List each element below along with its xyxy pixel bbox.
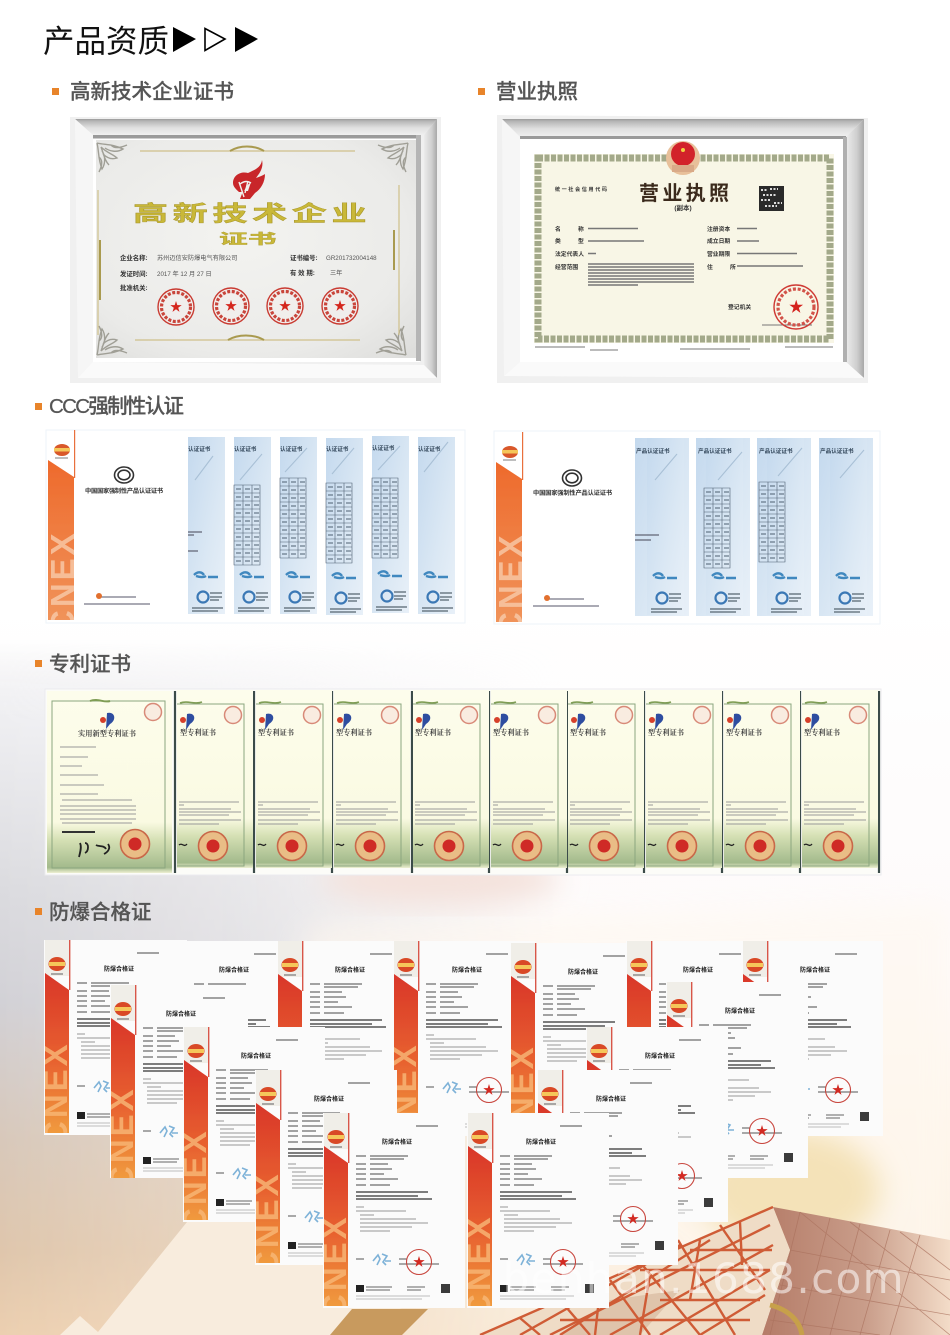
license details: 法定代表人 — [555, 250, 584, 258]
certificate 3 — [278, 941, 393, 1070]
separators — [175, 691, 879, 873]
blue panels: 产品认证证书 — [698, 447, 732, 455]
certificate 4 — [394, 941, 534, 1136]
certificate 14 — [316, 1113, 465, 1318]
license sheet — [534, 154, 834, 343]
panel: CCC certificate strip 1: 中国国家强制性产品认证证书 — [85, 487, 163, 495]
orange cover strip — [48, 430, 76, 620]
heading: CCC: CCC强制性认证 — [49, 395, 184, 418]
certificate 14: CNEX — [316, 1214, 353, 1318]
patent pages: 型专利证书 — [804, 728, 841, 737]
title: 产品资质 — [43, 23, 169, 59]
heading: patents: 专利证书 — [49, 653, 131, 676]
QR code — [759, 186, 784, 211]
certificate 5: 防爆合格证 — [568, 968, 598, 976]
panel: business license in frame: (副本) — [674, 203, 692, 212]
patent pages: 型专利证书 — [180, 728, 217, 737]
certificate 1: CNEX — [37, 1041, 74, 1145]
icon: triple arrows — [173, 27, 258, 52]
CCC logo — [114, 467, 134, 483]
certificate 11: CNEX — [579, 1128, 616, 1232]
patent pages — [177, 690, 878, 868]
back row — [37, 940, 883, 1148]
certificate 7: 防爆合格证 — [800, 966, 830, 974]
certificate 12: 防爆合格证 — [314, 1095, 344, 1103]
patent pages: 型专利证书 — [336, 728, 373, 737]
icon: red flame logo — [233, 160, 265, 199]
blue panels: 认证证书 — [188, 445, 211, 453]
certificate 11: 防爆合格证 — [645, 1052, 675, 1060]
orange cover strip: CNEX — [44, 530, 81, 634]
certificate details: 苏州迈信安防爆电气有限公司 — [157, 254, 237, 262]
certificate 1: 防爆合格证 — [104, 965, 134, 973]
panel: patent certificates strip — [45, 689, 881, 875]
license details: 成立日期 — [707, 237, 730, 245]
blue panels: 产品认证证书 — [636, 447, 670, 455]
certificate details: GR201732004148 — [326, 255, 377, 262]
certificate 3: 防爆合格证 — [335, 966, 365, 974]
watermark: benhan.1688.com — [503, 1254, 905, 1303]
certificate 1 — [37, 940, 187, 1145]
patent pages: 型专利证书 — [415, 728, 452, 737]
certificate 3: CNEX — [270, 1042, 307, 1146]
certificate 5 — [511, 943, 626, 1113]
certificate details — [120, 253, 377, 292]
certificate 9: CNEX — [659, 1083, 696, 1187]
blue panels — [635, 438, 873, 616]
certificate details: 2017 年 12 月 27 日 — [157, 270, 212, 278]
blue panels: 产品认证证书 — [759, 447, 793, 455]
certificate details: 批准机关: — [120, 283, 148, 292]
certificate 2: 防爆合格证 — [219, 966, 249, 974]
certificate 9: 防爆合格证 — [725, 1007, 755, 1015]
building: red lattice structure — [480, 1207, 950, 1335]
certificate 4: CNEX — [386, 1042, 423, 1146]
certificate 4: 防爆合格证 — [452, 966, 482, 974]
certificate 13: CNEX — [530, 1171, 567, 1275]
certificate 14: 防爆合格证 — [382, 1138, 412, 1146]
patent pages: 型专利证书 — [493, 728, 530, 737]
certificate 9 — [659, 982, 808, 1187]
patent pages: 型专利证书 — [258, 728, 295, 737]
certificate 6 — [627, 941, 742, 1027]
license details: 所 — [730, 263, 736, 271]
heading: business license: 营业执照 — [496, 80, 578, 104]
certificate 10: 防爆合格证 — [241, 1052, 271, 1060]
license details: 名 — [555, 225, 561, 233]
certificate 7 — [743, 941, 883, 1136]
stamp — [774, 285, 818, 329]
stamps — [158, 288, 358, 325]
certificate 8: 防爆合格证 — [166, 1010, 196, 1018]
panel: CCC certificate strip 2 — [492, 431, 880, 636]
blue panels: 产品认证证书 — [820, 447, 854, 455]
certificate details: 有 效 期: — [290, 268, 315, 277]
license details: 住 — [707, 263, 713, 271]
license details: 称 — [578, 225, 584, 233]
panel: business license in frame: 统一社会信用代码 — [555, 186, 607, 193]
blue panels: 认证证书 — [372, 444, 395, 452]
CCC logo — [562, 470, 582, 486]
panel: CCC certificate strip 2: 中国国家强制性产品认证证书 — [533, 489, 612, 497]
first patent certificate: 实用新型专利证书 — [78, 729, 137, 738]
blue panels: 认证证书 — [418, 445, 441, 453]
panel: CCC certificate strip 1 — [44, 430, 465, 634]
license details: 类 — [555, 237, 561, 245]
first patent certificate — [47, 691, 172, 873]
certificate 2 — [161, 941, 303, 1136]
license details: 型 — [578, 237, 584, 245]
license details: 登记机关 — [728, 303, 751, 311]
certificate 10: CNEX — [176, 1128, 213, 1232]
certificate 6: 防爆合格证 — [683, 966, 713, 974]
certificate 15 — [460, 1113, 609, 1318]
certificate 12: CNEX — [248, 1171, 285, 1275]
certificate title: 证书 — [219, 231, 277, 247]
certificate details: 三年 — [330, 269, 342, 277]
certificate details: 发证时间: — [120, 269, 148, 278]
blue panels — [188, 436, 455, 615]
orange cover strip — [496, 432, 524, 622]
certificate 5: CNEX — [503, 1044, 540, 1148]
license details — [555, 225, 751, 311]
certificate 15: 防爆合格证 — [526, 1138, 556, 1146]
certificate title: 高新技术企业 — [133, 202, 367, 226]
certificate details: 企业名称: — [120, 253, 148, 262]
license details: 营业期限 — [707, 250, 730, 258]
icon: national emblem — [666, 141, 700, 175]
certificate 8: CNEX — [103, 1086, 140, 1190]
panel: business license in frame — [497, 115, 868, 383]
orange cover strip: CNEX — [492, 532, 529, 636]
certificate 10 — [176, 1027, 325, 1232]
blue panels: 认证证书 — [234, 445, 257, 453]
panel: explosion-proof certificates stack — [37, 940, 883, 1318]
patent pages: 型专利证书 — [648, 728, 685, 737]
license details: 注册资本 — [707, 225, 730, 233]
blue panels: 认证证书 — [280, 445, 303, 453]
license title: 营业执照 — [639, 182, 729, 205]
title — [43, 23, 258, 59]
certificate 13 — [538, 1070, 678, 1265]
heading: explosion-proof certificate: 防爆合格证 — [49, 901, 152, 924]
certificate 8 — [110, 985, 248, 1178]
certificate 13: 防爆合格证 — [596, 1095, 626, 1103]
heading: high-tech enterprise certificate: 高新技术企业证书 — [70, 80, 234, 104]
certificate 11 — [579, 1027, 728, 1232]
certificate title — [133, 202, 367, 247]
certificate details: 证书编号: — [290, 253, 318, 262]
patent pages: 型专利证书 — [570, 728, 607, 737]
patent pages: 型专利证书 — [726, 728, 763, 737]
blue panels: 认证证书 — [326, 445, 349, 453]
background — [0, 664, 950, 1335]
license details: 经营范围 — [555, 263, 578, 271]
certificate 12 — [248, 1070, 397, 1275]
certificate 6: CNEX — [619, 1042, 656, 1146]
certificate 15: CNEX — [460, 1214, 497, 1318]
middle and front rows — [103, 982, 808, 1318]
certificate 7: CNEX — [735, 1042, 772, 1146]
ornaments: corners and gold lines — [97, 143, 408, 355]
panel: high-tech certificate in frame — [70, 117, 441, 383]
